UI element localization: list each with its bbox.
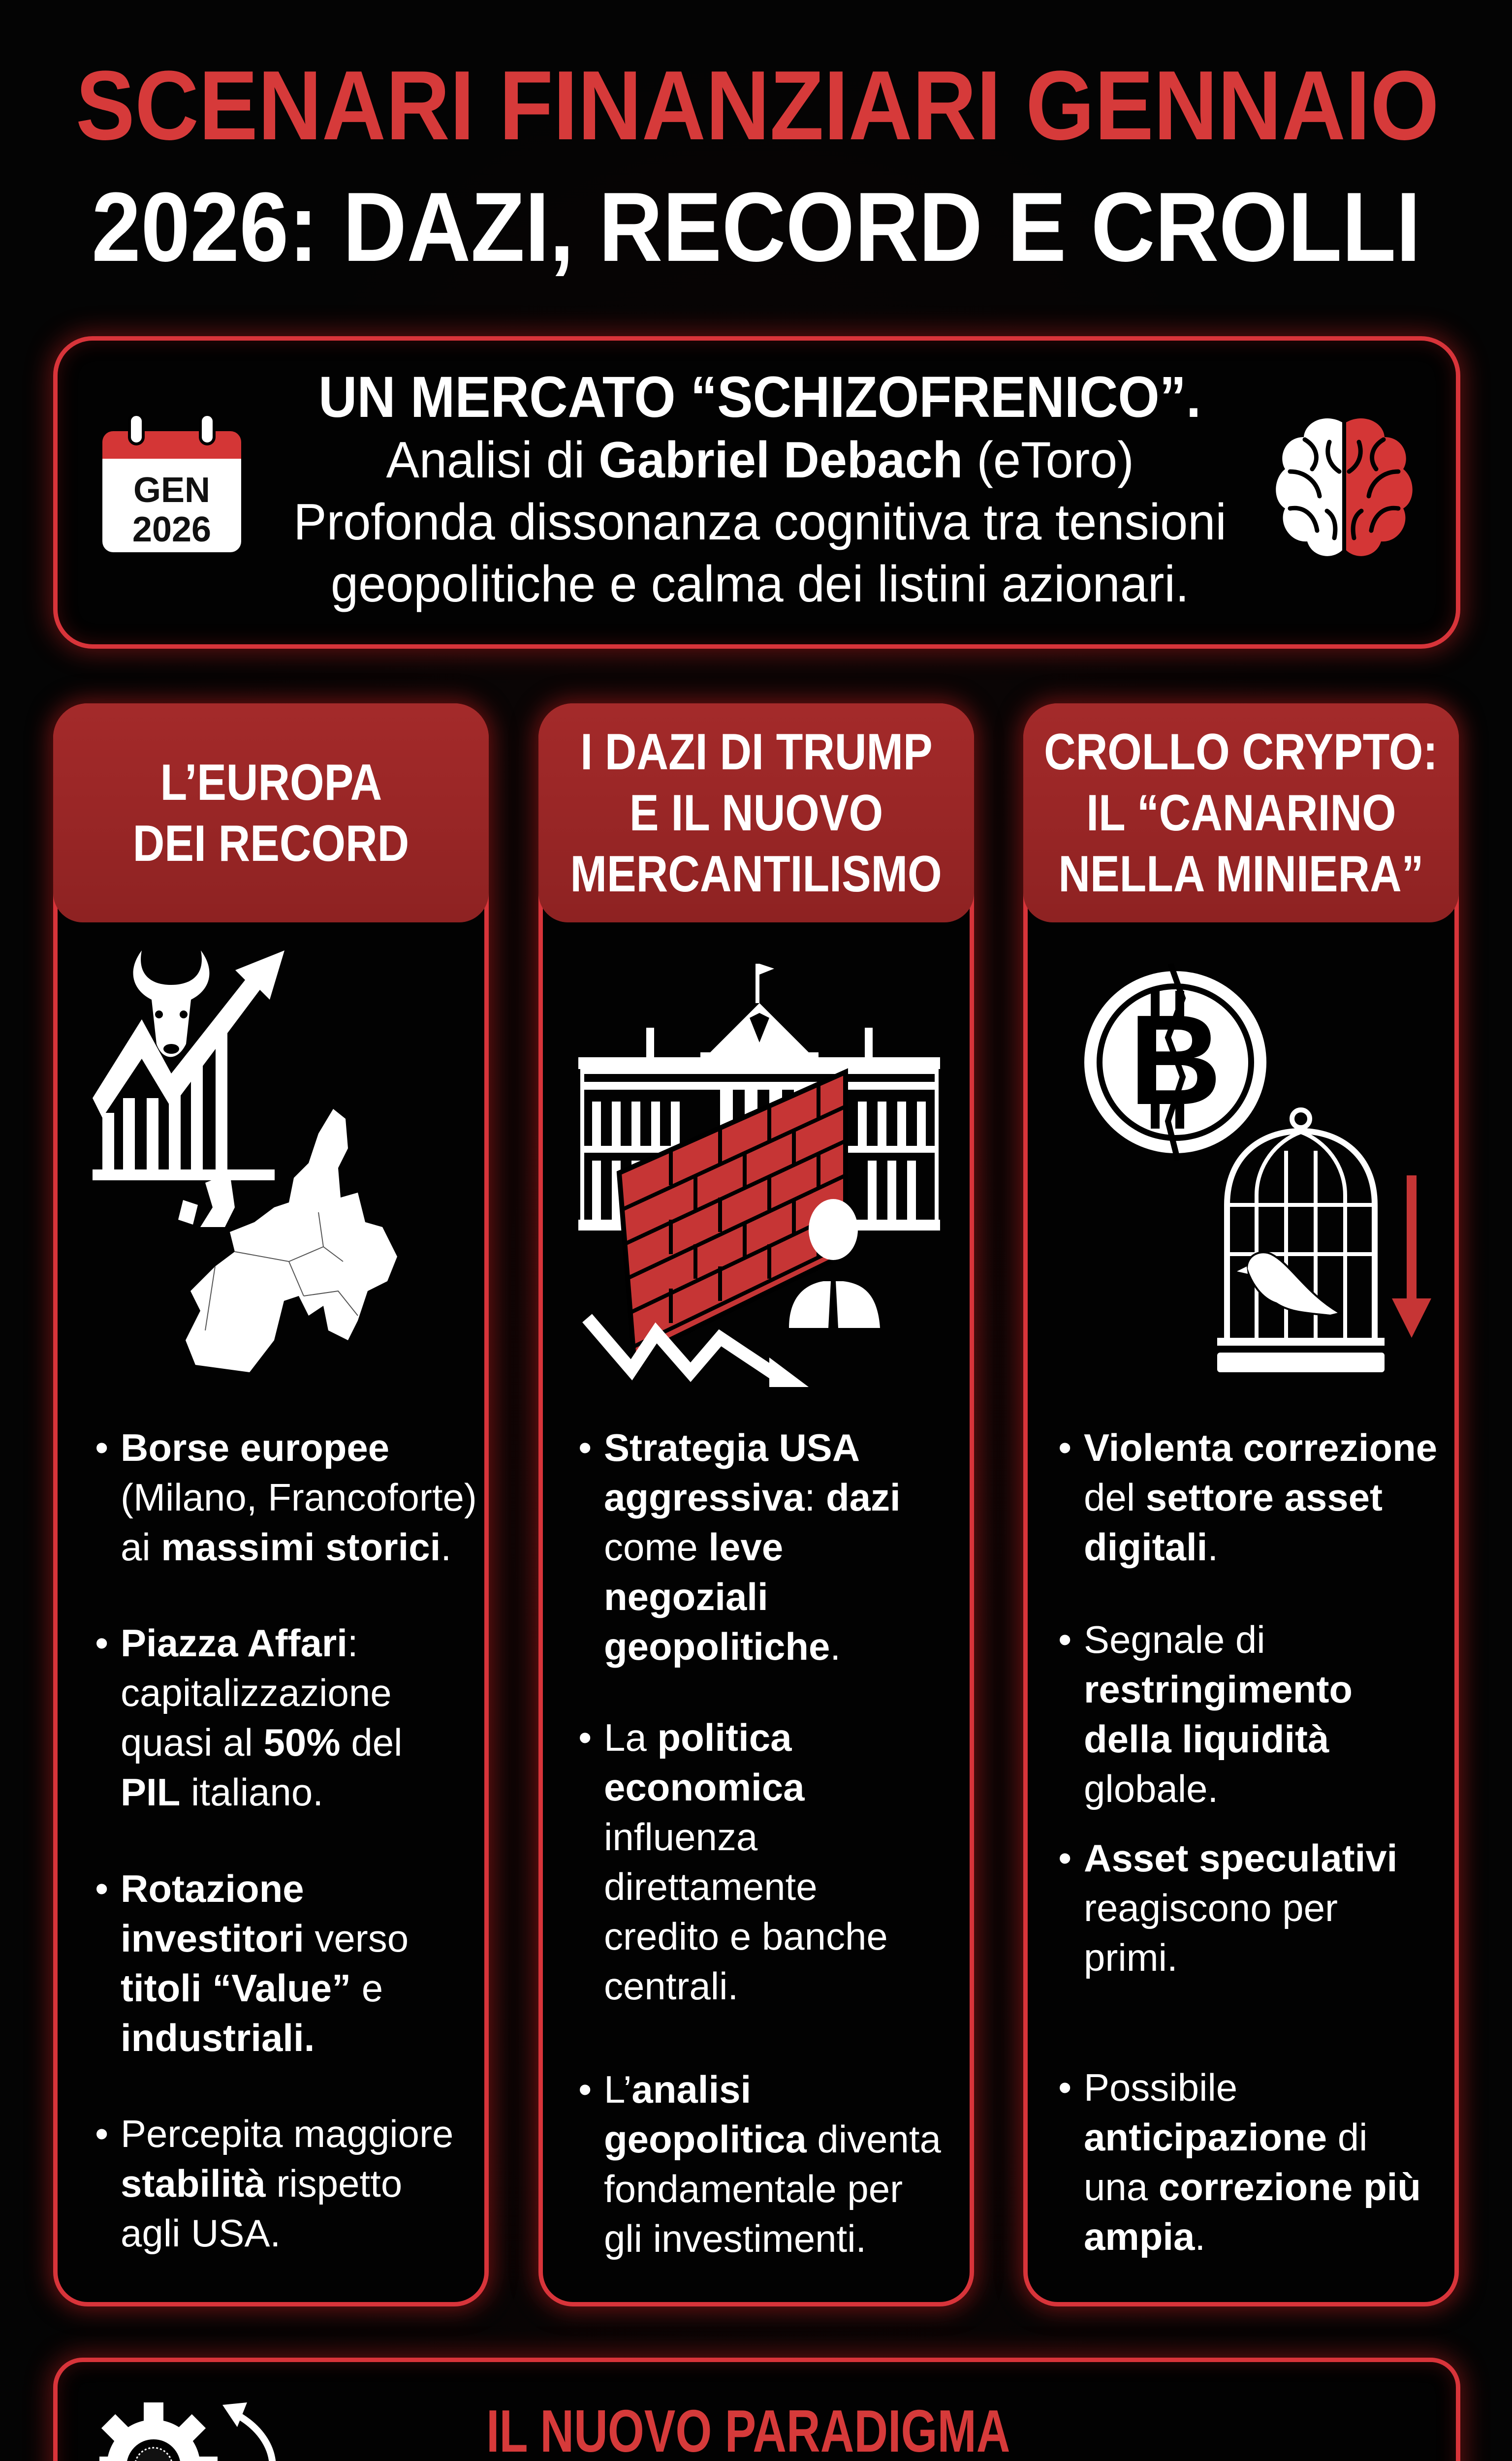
text block: Dazi bullets: centrali.: [604, 1964, 738, 2008]
text block: Crypto bullets: del settore asset: [1084, 1476, 1383, 1519]
text block: Dazi bullets: direttamente: [604, 1865, 818, 1908]
text block: Crypto bullets: Possibile: [1084, 2066, 1237, 2109]
text block: Europa bullets: PIL italiano.: [121, 1770, 323, 1814]
heading: Crypto: CROLLO CRYPTO:: [1044, 724, 1438, 781]
icon: europe map: [178, 1109, 397, 1372]
icon: calendar: 2026: [132, 510, 211, 549]
text block: Crypto bullets: Asset speculativi: [1084, 1836, 1397, 1880]
text block: Europa bullets: ai massimi storici.: [121, 1525, 451, 1569]
text block: Europa bullets: (Milano, Francoforte): [121, 1476, 477, 1519]
text block: Europa bullets: investitori verso: [121, 1917, 409, 1960]
title: SCENARI FINANZIARI GENNAIO: [76, 51, 1439, 160]
title: 2026: DAZI, RECORD E CROLLI: [92, 172, 1420, 282]
text block: intro: Analisi di Gabriel Debach (eToro): [386, 432, 1134, 489]
panel: Dazi di Trump: gli investimenti.: [604, 2217, 866, 2260]
heading: Crypto: IL “CANARINO: [1086, 785, 1396, 842]
text block: Europa bullets: capitalizzazione: [121, 1671, 392, 1714]
heading: Crypto: [1023, 703, 1459, 922]
text block: Dazi bullets: L’analisi: [604, 2068, 751, 2111]
text block: Dazi bullets: influenza: [604, 1815, 757, 1859]
text block: Crypto bullets: della liquidità: [1084, 1717, 1329, 1761]
text block: Crypto bullets: restringimento: [1084, 1668, 1353, 1711]
text block: Crypto bullets: reagiscono per: [1084, 1886, 1338, 1929]
text block: Dazi bullets: geopolitiche.: [604, 1625, 841, 1668]
panel: Europa dei record: agli USA.: [121, 2211, 281, 2255]
heading: Europa: [53, 703, 489, 922]
icon: gear and globe: [99, 2402, 276, 2461]
text block: Europa bullets: [96, 1426, 477, 2255]
heading: Dazi: [538, 703, 974, 922]
icon: red down arrow: [1392, 1175, 1431, 1338]
icon: broken bitcoin: [1084, 971, 1266, 1153]
text block: Crypto bullets: primi.: [1084, 1936, 1178, 1979]
panel: nuovo paradigma: [53, 2358, 1460, 2461]
icon: brain: [1276, 418, 1413, 556]
icon: bird cage: [1217, 1107, 1385, 1372]
icon: broken bitcoin: B: [1129, 989, 1222, 1132]
heading: Dazi: MERCANTILISMO: [570, 846, 942, 903]
panel: Crollo crypto: [1023, 703, 1459, 2306]
text block: intro: Profonda dissonanza cognitiva tra tensioni: [293, 494, 1227, 551]
text block: Dazi bullets: geopolitica diventa: [604, 2117, 941, 2161]
heading: Crypto: NELLA MINIERA”: [1059, 846, 1423, 903]
icon: bull and rising chart: [93, 950, 284, 1180]
heading: Europa: DEI RECORD: [133, 815, 409, 872]
icon: calendar: [102, 416, 241, 552]
text block: Crypto bullets: Violenta correzione: [1084, 1426, 1437, 1469]
text block: Crypto bullets: una correzione più: [1084, 2165, 1421, 2209]
text block: Crypto bullets: digitali.: [1084, 1525, 1218, 1569]
text block: Europa bullets: Borse europee: [121, 1426, 389, 1469]
text block: Dazi bullets: come leve: [604, 1525, 783, 1569]
text block: Europa bullets: Percepita maggiore: [121, 2112, 453, 2155]
text block: intro: UN MERCATO “SCHIZOFRENICO”.: [318, 365, 1201, 430]
heading: Dazi: E IL NUOVO: [630, 785, 883, 842]
text block: intro: [293, 365, 1227, 613]
text block: Crypto bullets: Segnale di: [1084, 1618, 1265, 1661]
text block: Europa bullets: Piazza Affari:: [121, 1621, 358, 1665]
panel: Crollo crypto: ampia.: [1084, 2215, 1205, 2258]
text block: Dazi bullets: credito e banche: [604, 1915, 888, 1958]
text block: Dazi bullets: negoziali: [604, 1575, 768, 1618]
text block: Europa bullets: titoli “Value” e: [121, 1966, 383, 2010]
text block: Dazi bullets: aggressiva: dazi: [604, 1476, 901, 1519]
panel: intro: [53, 336, 1460, 649]
heading: Dazi: I DAZI DI TRUMP: [580, 724, 932, 781]
text block: intro: geopolitiche e calma dei listini azionari.: [331, 556, 1189, 613]
text block: Dazi bullets: [580, 1426, 941, 2260]
text block: Dazi bullets: Strategia USA: [604, 1426, 860, 1469]
text block: Crypto bullets: globale.: [1084, 1767, 1218, 1810]
text block: Dazi bullets: fondamentale per: [604, 2167, 903, 2210]
text block: Dazi bullets: economica: [604, 1766, 804, 1809]
panel: Europa dei record: [53, 703, 489, 2306]
text block: Europa bullets: industriali.: [121, 2016, 315, 2059]
heading: Europa: L’EUROPA: [160, 754, 382, 811]
text block: Crypto bullets: anticipazione di: [1084, 2115, 1367, 2159]
icon: calendar: GEN: [133, 471, 210, 510]
text block: Crypto bullets: [1060, 1426, 1437, 2258]
icon: white house, wall, man, falling arrow: [578, 964, 940, 1387]
text block: Dazi bullets: La politica: [604, 1716, 791, 1759]
text block: Europa bullets: quasi al 50% del: [121, 1721, 402, 1764]
text block: Europa bullets: stabilità rispetto: [121, 2162, 402, 2205]
text block: Europa bullets: Rotazione: [121, 1867, 304, 1910]
title: [76, 51, 1439, 282]
panel: Dazi di Trump: [538, 703, 974, 2306]
